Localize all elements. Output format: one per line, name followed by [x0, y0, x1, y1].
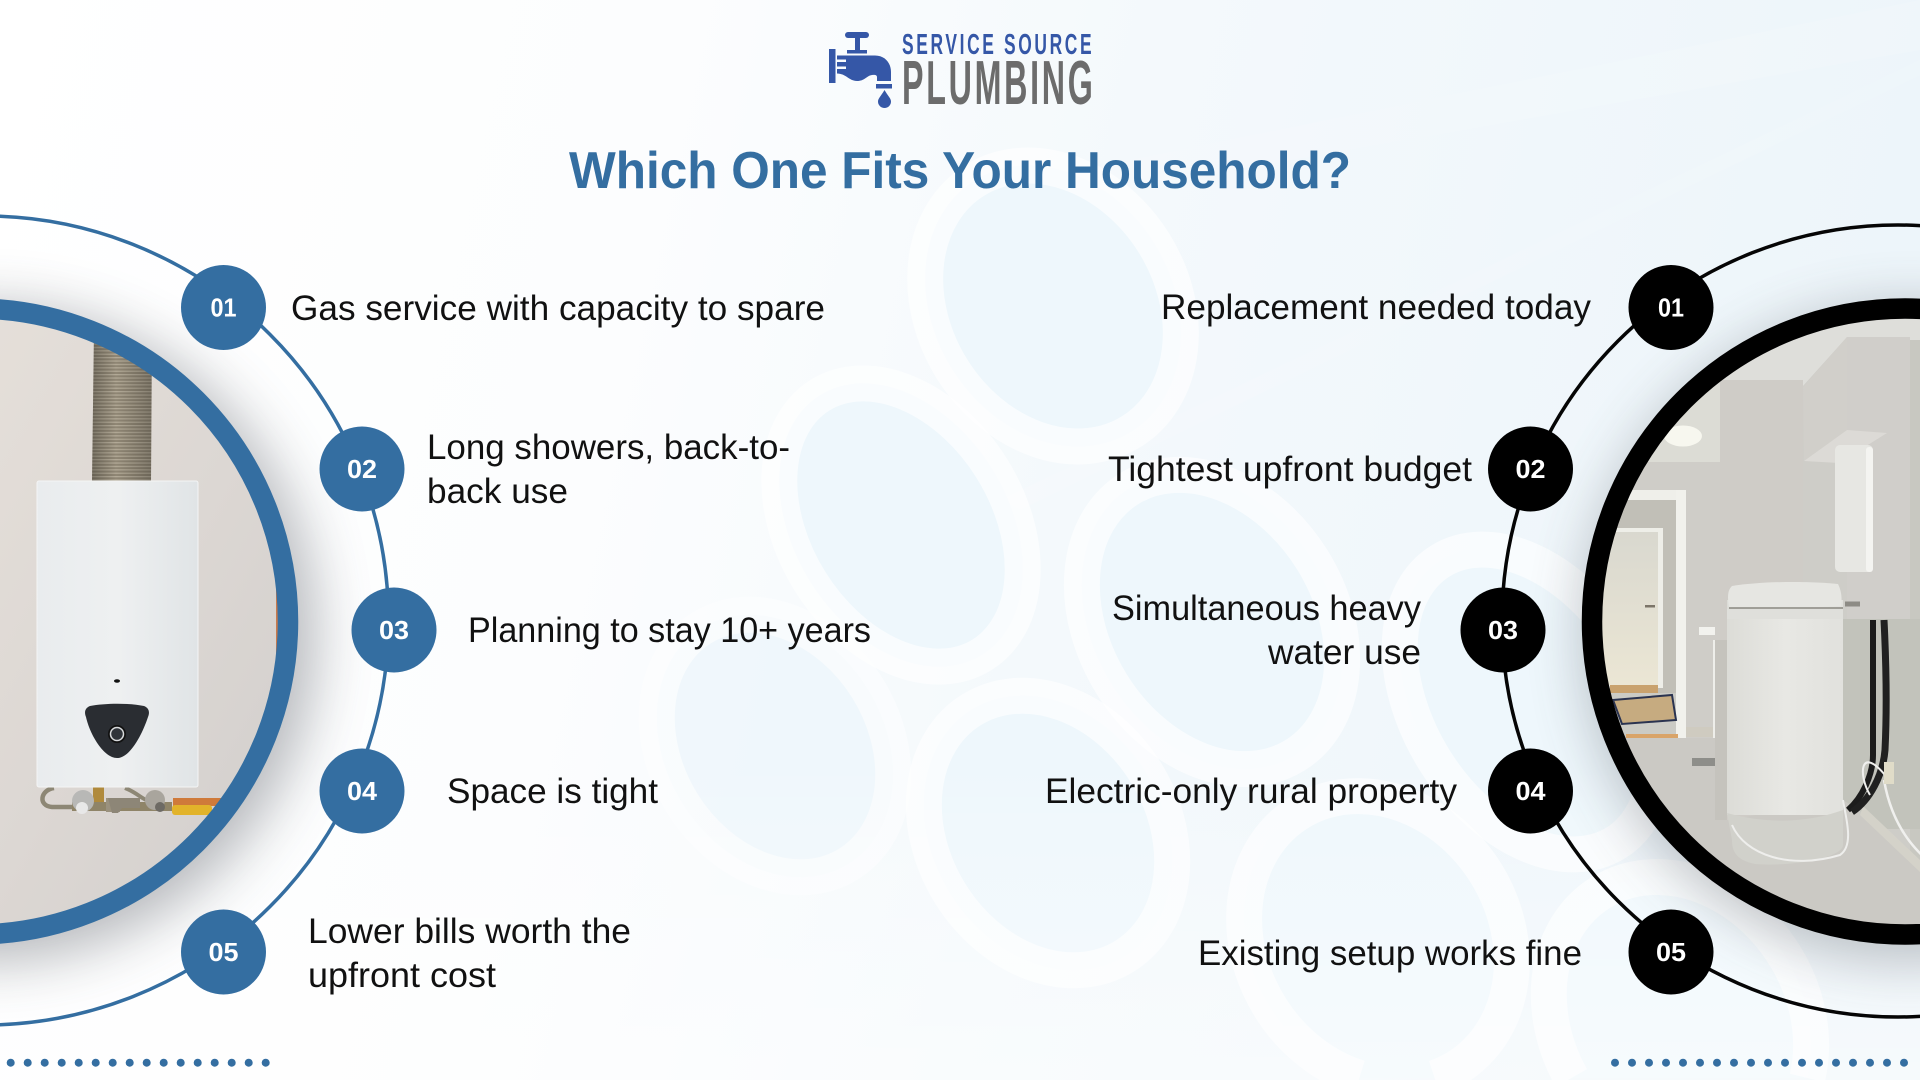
badge: left 03 — [352, 588, 436, 672]
text: right 03: Simultaneous heavy — [1112, 589, 1421, 628]
badge: right 05 — [1628, 910, 1714, 994]
badge: left 01 — [181, 265, 266, 350]
badge: left 01: 01 — [210, 292, 236, 322]
badge: left 05: 05 — [208, 937, 238, 967]
badge: left 03: 03 — [379, 615, 409, 645]
badge: left 04 — [320, 748, 404, 834]
logo — [829, 29, 1093, 118]
photo: wall mounted gas water heater — [0, 320, 278, 924]
text: left 02: Long showers, back-to- — [427, 428, 790, 467]
badge: left 02 — [320, 426, 404, 512]
text: left 02 — [427, 428, 790, 511]
badge: right 05: 05 — [1656, 937, 1686, 967]
logo text: plumbing: PLUMBING — [902, 49, 1093, 118]
shadow: left photo — [0, 306, 316, 962]
panel: left tankless gas heater — [0, 216, 388, 1025]
dots: bottom right — [1611, 1059, 1908, 1067]
badge: left 05 — [181, 910, 266, 994]
pipes under heater — [42, 787, 223, 815]
text: right 01: Replacement needed today — [1161, 288, 1591, 327]
outer arc: right — [1502, 225, 1920, 1017]
photo: utility room with storage water heater — [1602, 318, 1920, 924]
title: Which One Fits Your Household? — [569, 142, 1351, 200]
panel: right tank heater — [1502, 225, 1920, 1017]
text: left 05 — [308, 912, 631, 995]
text: left 02: back use — [427, 472, 568, 511]
ring: right photo frame — [1592, 308, 1920, 934]
text: left 01: Gas service with capacity to spare — [291, 289, 825, 328]
badge: right 02 — [1488, 426, 1573, 512]
badge: left 04: 04 — [347, 776, 378, 806]
badge: right 04 — [1488, 748, 1573, 834]
badge: right 03 — [1460, 588, 1546, 672]
badge: right 01: 01 — [1658, 292, 1684, 322]
text: right 04: Electric-only rural property — [1045, 772, 1457, 811]
text: left 03: Planning to stay 10+ years — [468, 611, 871, 650]
logo text: service source: SERVICE SOURCE — [902, 29, 1092, 61]
outer arc: left — [0, 216, 388, 1025]
text: left 05: upfront cost — [308, 956, 496, 995]
text: right 03 — [1112, 589, 1421, 672]
text: left 04: Space is tight — [447, 772, 658, 811]
dots: bottom left — [7, 1059, 270, 1067]
badge: left 02: 02 — [347, 454, 377, 484]
text: right 05: Existing setup works fine — [1198, 934, 1582, 973]
text: right 02: Tightest upfront budget — [1108, 450, 1472, 489]
text: right 03: water use — [1267, 633, 1421, 672]
icon: faucet with drop — [829, 32, 892, 108]
badge: right 01 — [1628, 265, 1714, 350]
badge: right 04: 04 — [1516, 776, 1546, 806]
badge: right 03: 03 — [1488, 615, 1518, 645]
shadow: right photo — [1582, 306, 1920, 962]
text: left 05: Lower bills worth the — [308, 912, 631, 951]
ring: left photo frame — [0, 308, 288, 934]
badge: right 02: 02 — [1516, 454, 1546, 484]
